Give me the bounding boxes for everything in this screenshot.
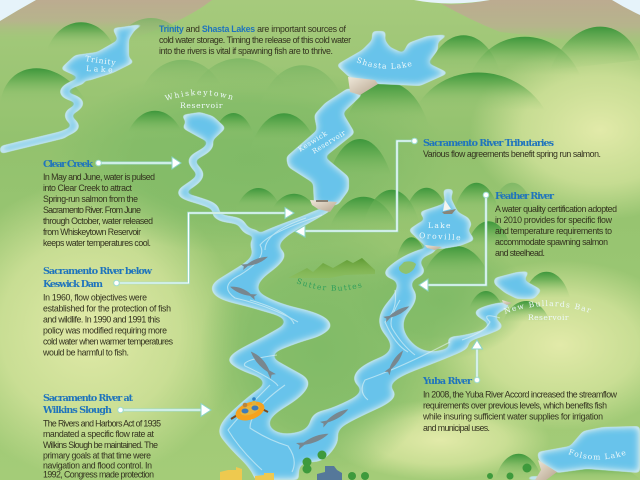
text block: Sacramento River below Keswick Dam: Keswick Dam (43, 279, 103, 290)
text block: Clear Creek: through October, water released (43, 216, 153, 226)
text block: Sacramento River below Keswick Dam: Sacramento River below (43, 266, 153, 277)
dam: Shasta (348, 77, 378, 95)
text block: Sacramento River at Wilkins Slough: The Rivers and Harbors Act of 1935 (43, 418, 161, 428)
text block: Clear Creek: Sacramento River. From June (43, 205, 141, 215)
lake labels: Shasta Lake (356, 57, 412, 69)
text block: Yuba River: while insuring sufficient water supplies for irrigation (422, 412, 603, 422)
lake labels: Lake (428, 221, 451, 230)
text: Trinity and Shasta Lakes intro: into the rivers is vital if spawning fish are to thrive. (159, 46, 333, 56)
text: Trinity and Shasta Lakes intro: cold water storage. Timing the release of this cold water (159, 35, 351, 45)
lake labels: Lake (86, 64, 113, 74)
leader: Wilkins Slough arrow (118, 404, 211, 416)
dam: New Bullards Bar (502, 300, 512, 305)
text block: Sacramento River at Wilkins Slough: Wilkins Slough (42, 405, 112, 416)
text block: Sacramento River at Wilkins Slough: 1992, Congress made protection (43, 470, 154, 480)
text block: Feather River: accommodate spawning salmon (495, 237, 608, 247)
text: Trinity and Shasta Lakes intro: Trinity and Shasta Lakes are important sources of (159, 24, 347, 34)
text block: Sacramento River below Keswick Dam: In 1960, flow objectives were (43, 292, 147, 302)
text block: Sacramento River at Wilkins Slough (42, 393, 161, 480)
text block: Sacramento River Tributaries (423, 138, 601, 159)
leader: Tributaries arrow (295, 138, 417, 237)
mountains (0, 0, 640, 52)
text block: Sacramento River below Keswick Dam: established for the protection of fish (43, 304, 171, 314)
text block: Clear Creek: Spring-run salmon from the (43, 194, 138, 204)
text block: Feather River: Feather River (495, 191, 555, 202)
text block: Clear Creek: Clear Creek (43, 159, 93, 170)
Trinity Lake and outflow (60, 23, 147, 81)
dam: Oroville (425, 245, 442, 250)
back hills (115, 18, 535, 215)
text block: Clear Creek (43, 159, 155, 248)
text block: Sacramento River at Wilkins Slough: mandated a specific flow rate at (43, 429, 155, 439)
label: Sutter Buttes: Sutter Buttes (296, 278, 362, 291)
Sutter Buttes mountains (288, 258, 375, 278)
lake labels: Reservoir (311, 129, 347, 156)
lake labels: Trinity (85, 54, 117, 67)
Clear Creek (181, 142, 258, 234)
text block: Yuba River: and municipal uses. (423, 423, 490, 433)
text block: Yuba River: requirements over previous levels, which benefits fish (423, 400, 607, 410)
dam: Keswick (310, 200, 337, 212)
text block: Clear Creek: into Clear Creek to attract (43, 183, 133, 193)
lake labels (85, 54, 626, 460)
lake labels: Reservoir (528, 313, 569, 322)
icon: sailboat (442, 200, 456, 214)
lake labels: New Bullards Bar (504, 300, 591, 314)
text block: Sacramento River below Keswick Dam: would be harmful to fish. (42, 348, 129, 358)
New Bullards Bar Reservoir (494, 271, 542, 299)
icon: raft with paddlers (231, 397, 268, 424)
leader: Clear Creek arrow (96, 157, 181, 169)
text block: Feather River: and steelhead. (495, 248, 545, 258)
text block: Sacramento River below Keswick Dam: policy was modified requiring more (43, 326, 167, 336)
dam: Folsom (535, 460, 557, 480)
fish: salmon (229, 254, 411, 450)
text block: Sacramento River Tributaries: Sacramento River Tributaries (423, 138, 554, 149)
text block: Clear Creek: keeps water temperatures cool. (43, 238, 151, 248)
lake labels: Reservoir (180, 101, 223, 110)
text block: Yuba River: In 2008, the Yuba River Accord increased the streamflow (423, 390, 618, 400)
lake labels: Folsom Lake (568, 448, 626, 460)
text block: Clear Creek: from Whiskeytown Reservoir (43, 227, 141, 237)
text block: Feather River: A water quality certification adopted (495, 204, 617, 214)
text block: Sacramento River at Wilkins Slough: Sacramento River at (43, 393, 134, 404)
sky corners (0, 0, 640, 21)
text block: Feather River (495, 191, 617, 258)
lake labels: Keswick (297, 129, 329, 154)
Keswick Reservoir (286, 88, 363, 205)
text block: Clear Creek: In May and June, water is pulsed (43, 172, 155, 182)
Whiskeytown Reservoir (181, 112, 226, 143)
river current streaks (228, 215, 500, 472)
lake labels: Oroville (419, 231, 461, 242)
main river with tributaries (212, 207, 509, 480)
text: Trinity and Shasta Lakes intro (159, 24, 351, 56)
Lake Oroville (408, 189, 475, 249)
text block: Feather River: in 2010 provides for specific flow (495, 215, 613, 225)
Folsom Lake (537, 426, 640, 473)
text block: Sacramento River below Keswick Dam (42, 266, 174, 358)
text block: Yuba River: Yuba River (422, 376, 473, 387)
city: buildings and trees (220, 450, 532, 480)
leader: Yuba River arrow (472, 340, 482, 383)
leader: Feather River arrow (419, 192, 489, 291)
Shasta Lake (336, 31, 450, 86)
text block: Sacramento River below Keswick Dam: cold water when warmer temperatures (43, 336, 174, 346)
text block: Sacramento River at Wilkins Slough: primary goals at that time were (43, 450, 151, 460)
text block: Yuba River (422, 376, 618, 433)
text block: Feather River: and temperature requirements to (495, 226, 612, 236)
leader: Keswick Dam arrow (114, 208, 294, 286)
Feather River island (399, 261, 416, 274)
text block: Sacramento River at Wilkins Slough: navigation and flood control. In (43, 460, 152, 470)
lake labels: Whiskeytown (164, 90, 232, 100)
text block: Sacramento River below Keswick Dam: and wildlife. In 1990 and 1991 this (43, 314, 161, 324)
text block: Sacramento River at Wilkins Slough: Wilkins Slough be maintained. The (43, 440, 158, 450)
text block: Sacramento River Tributaries: Various flow agreements benefit spring run salmon. (423, 149, 601, 159)
